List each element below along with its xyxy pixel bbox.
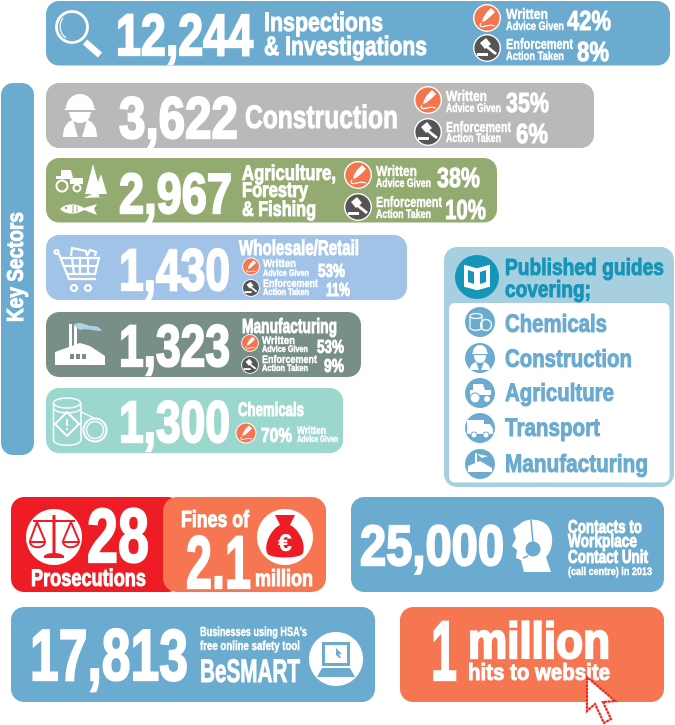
guide: chemicals: Chemicals [505,310,607,338]
enforcement action stat: 8% [577,36,609,67]
guide: construction [465,343,632,373]
icon: pen [242,258,260,275]
agriculture label [242,162,336,221]
website numeral: 1 [431,604,457,698]
guide: agriculture: Agriculture [505,379,614,407]
icon: cursor arrow [587,677,615,723]
chemicals label: Chemicals [238,400,304,421]
written advice stat [506,5,611,36]
icon: gavel [344,193,372,221]
icon: money bag [257,509,313,565]
agriculture label: & Fishing [242,198,316,221]
icon: money bag: € [278,530,292,557]
enforcement action stat: Action Taken [376,207,431,221]
icon: open book [455,255,499,299]
enforcement action stat [262,354,344,376]
icon: pen [344,161,372,189]
chemicals count: 1,300 [119,390,230,455]
panel: construction [46,83,594,151]
fines unit: million [255,565,313,591]
icon: gavel [242,279,260,297]
icon: pen [473,4,501,32]
guides heading: covering; [505,276,591,302]
icon: gavel [414,118,442,146]
written advice stat: Advice Given [262,344,308,354]
manufacturing label: Manufacturing [242,316,337,338]
besmart count: 17,813 [30,616,188,696]
written advice stat: Advice Given [376,176,431,190]
icon: tractor tree fish [56,164,107,215]
written advice stat: Written [263,258,296,270]
panel: agriculture forestry fishing [46,158,497,226]
icon: gavel [241,356,259,374]
enforcement action stat: 11% [326,280,350,300]
written advice stat: 38% [437,162,480,193]
panel: prosecutions [11,494,181,592]
written advice stat: Written [376,163,417,180]
key sectors side label: Key Sectors [2,212,28,322]
agriculture label: Forestry [242,179,308,202]
written advice stat: 53% [318,261,345,281]
website label: hits to website [468,659,610,685]
enforcement action stat: Action Taken [262,363,308,373]
enforcement action stat: Action Taken [263,287,309,297]
written advice stat: 42% [567,5,611,36]
guide: transport [465,413,601,443]
guide: chemicals [465,307,607,338]
written advice stat [263,258,345,281]
written advice stat: 70% [261,425,292,447]
panel: fines [163,497,326,604]
prosecutions count: 28 [87,494,149,579]
icon: shopping cart [54,248,99,291]
guide: manufacturing: Manufacturing [505,450,648,478]
contacts description: Workplace [568,531,637,551]
written advice stat [262,335,344,357]
icon: pen [414,86,442,114]
guide: transport: Transport [505,414,601,442]
guide: manufacturing [465,449,648,479]
enforcement action stat: 10% [445,194,486,225]
website million: million [468,613,610,669]
contacts description [568,517,652,578]
agriculture count: 2,967 [119,162,232,226]
enforcement action stat: Enforcement [506,36,573,53]
inspections count: 12,244 [116,3,253,68]
written advice stat [446,87,549,118]
panel: published guides [444,247,674,487]
contacts description: (call centre) in 2013 [568,566,652,578]
guide: construction: Construction [505,345,632,373]
besmart description: free online safety tool [200,638,300,653]
construction label: Construction [245,99,398,135]
contacts description: Contact Unit [568,547,648,567]
panel: contact unit [351,497,664,592]
enforcement action stat: Action Taken [446,131,501,145]
written advice stat: 53% [317,337,344,357]
enforcement action stat [446,118,548,149]
contacts description: Contacts to [568,517,642,537]
written advice stat: Advice Given [297,434,338,444]
icon: factory [55,323,105,365]
icon: construction worker [63,94,97,137]
icon: headset head [512,520,552,572]
fines amount: 2.1 [186,521,251,604]
besmart description [200,624,307,689]
icon: scales [26,509,82,565]
enforcement action stat: 6% [516,118,548,149]
written advice stat: Advice Given [263,268,309,278]
icon: pen [236,422,256,444]
icon: pen [241,334,259,352]
guides heading [505,254,664,302]
wholesale count: 1,430 [119,238,230,303]
enforcement action stat: Enforcement [446,119,511,136]
inspections label: Inspections [264,7,383,37]
written advice stat [261,425,338,447]
agriculture label: Agriculture, [242,162,336,185]
enforcement action stat [506,36,609,67]
enforcement action stat: Enforcement [376,194,442,211]
besmart description: BeSMART [200,653,300,689]
written advice stat: Written [297,425,326,437]
key sectors side label [1,83,34,455]
written advice stat: Written [506,6,548,23]
icon: laptop [309,632,363,686]
written advice stat: 35% [506,87,549,118]
panel: besmart [11,607,375,702]
written advice stat: Written [446,88,487,105]
contacts count: 25,000 [360,514,504,578]
written advice stat: Advice Given [446,101,501,115]
written advice stat: Advice Given [506,19,564,33]
icon: chemical drum [54,398,106,445]
icon: gavel [473,34,501,62]
panel: website hits [400,604,664,723]
enforcement action stat [376,194,486,225]
besmart description: Businesses using HSA's [200,624,307,639]
enforcement action stat: 9% [324,356,344,376]
written advice stat [376,162,480,193]
panel: inspections [46,1,670,68]
wholesale label: Wholesale/Retail [239,237,359,260]
enforcement action stat: Enforcement [262,354,317,366]
panel: manufacturing [46,312,361,379]
manufacturing count: 1,323 [119,314,230,379]
panel: chemicals [46,388,343,455]
inspections label: & Investigations [264,31,427,61]
fines label: Fines of [181,506,249,532]
enforcement action stat [263,278,350,300]
construction count: 3,622 [119,86,238,151]
written advice stat: Written [262,335,295,347]
icon: magnifying glass [56,12,100,55]
enforcement action stat: Enforcement [263,278,318,290]
panel: wholesale retail [46,235,407,303]
inspections label [264,7,427,61]
enforcement action stat: Action Taken [506,49,564,63]
prosecutions label: Prosecutions [31,565,146,592]
guide: agriculture [465,378,614,408]
